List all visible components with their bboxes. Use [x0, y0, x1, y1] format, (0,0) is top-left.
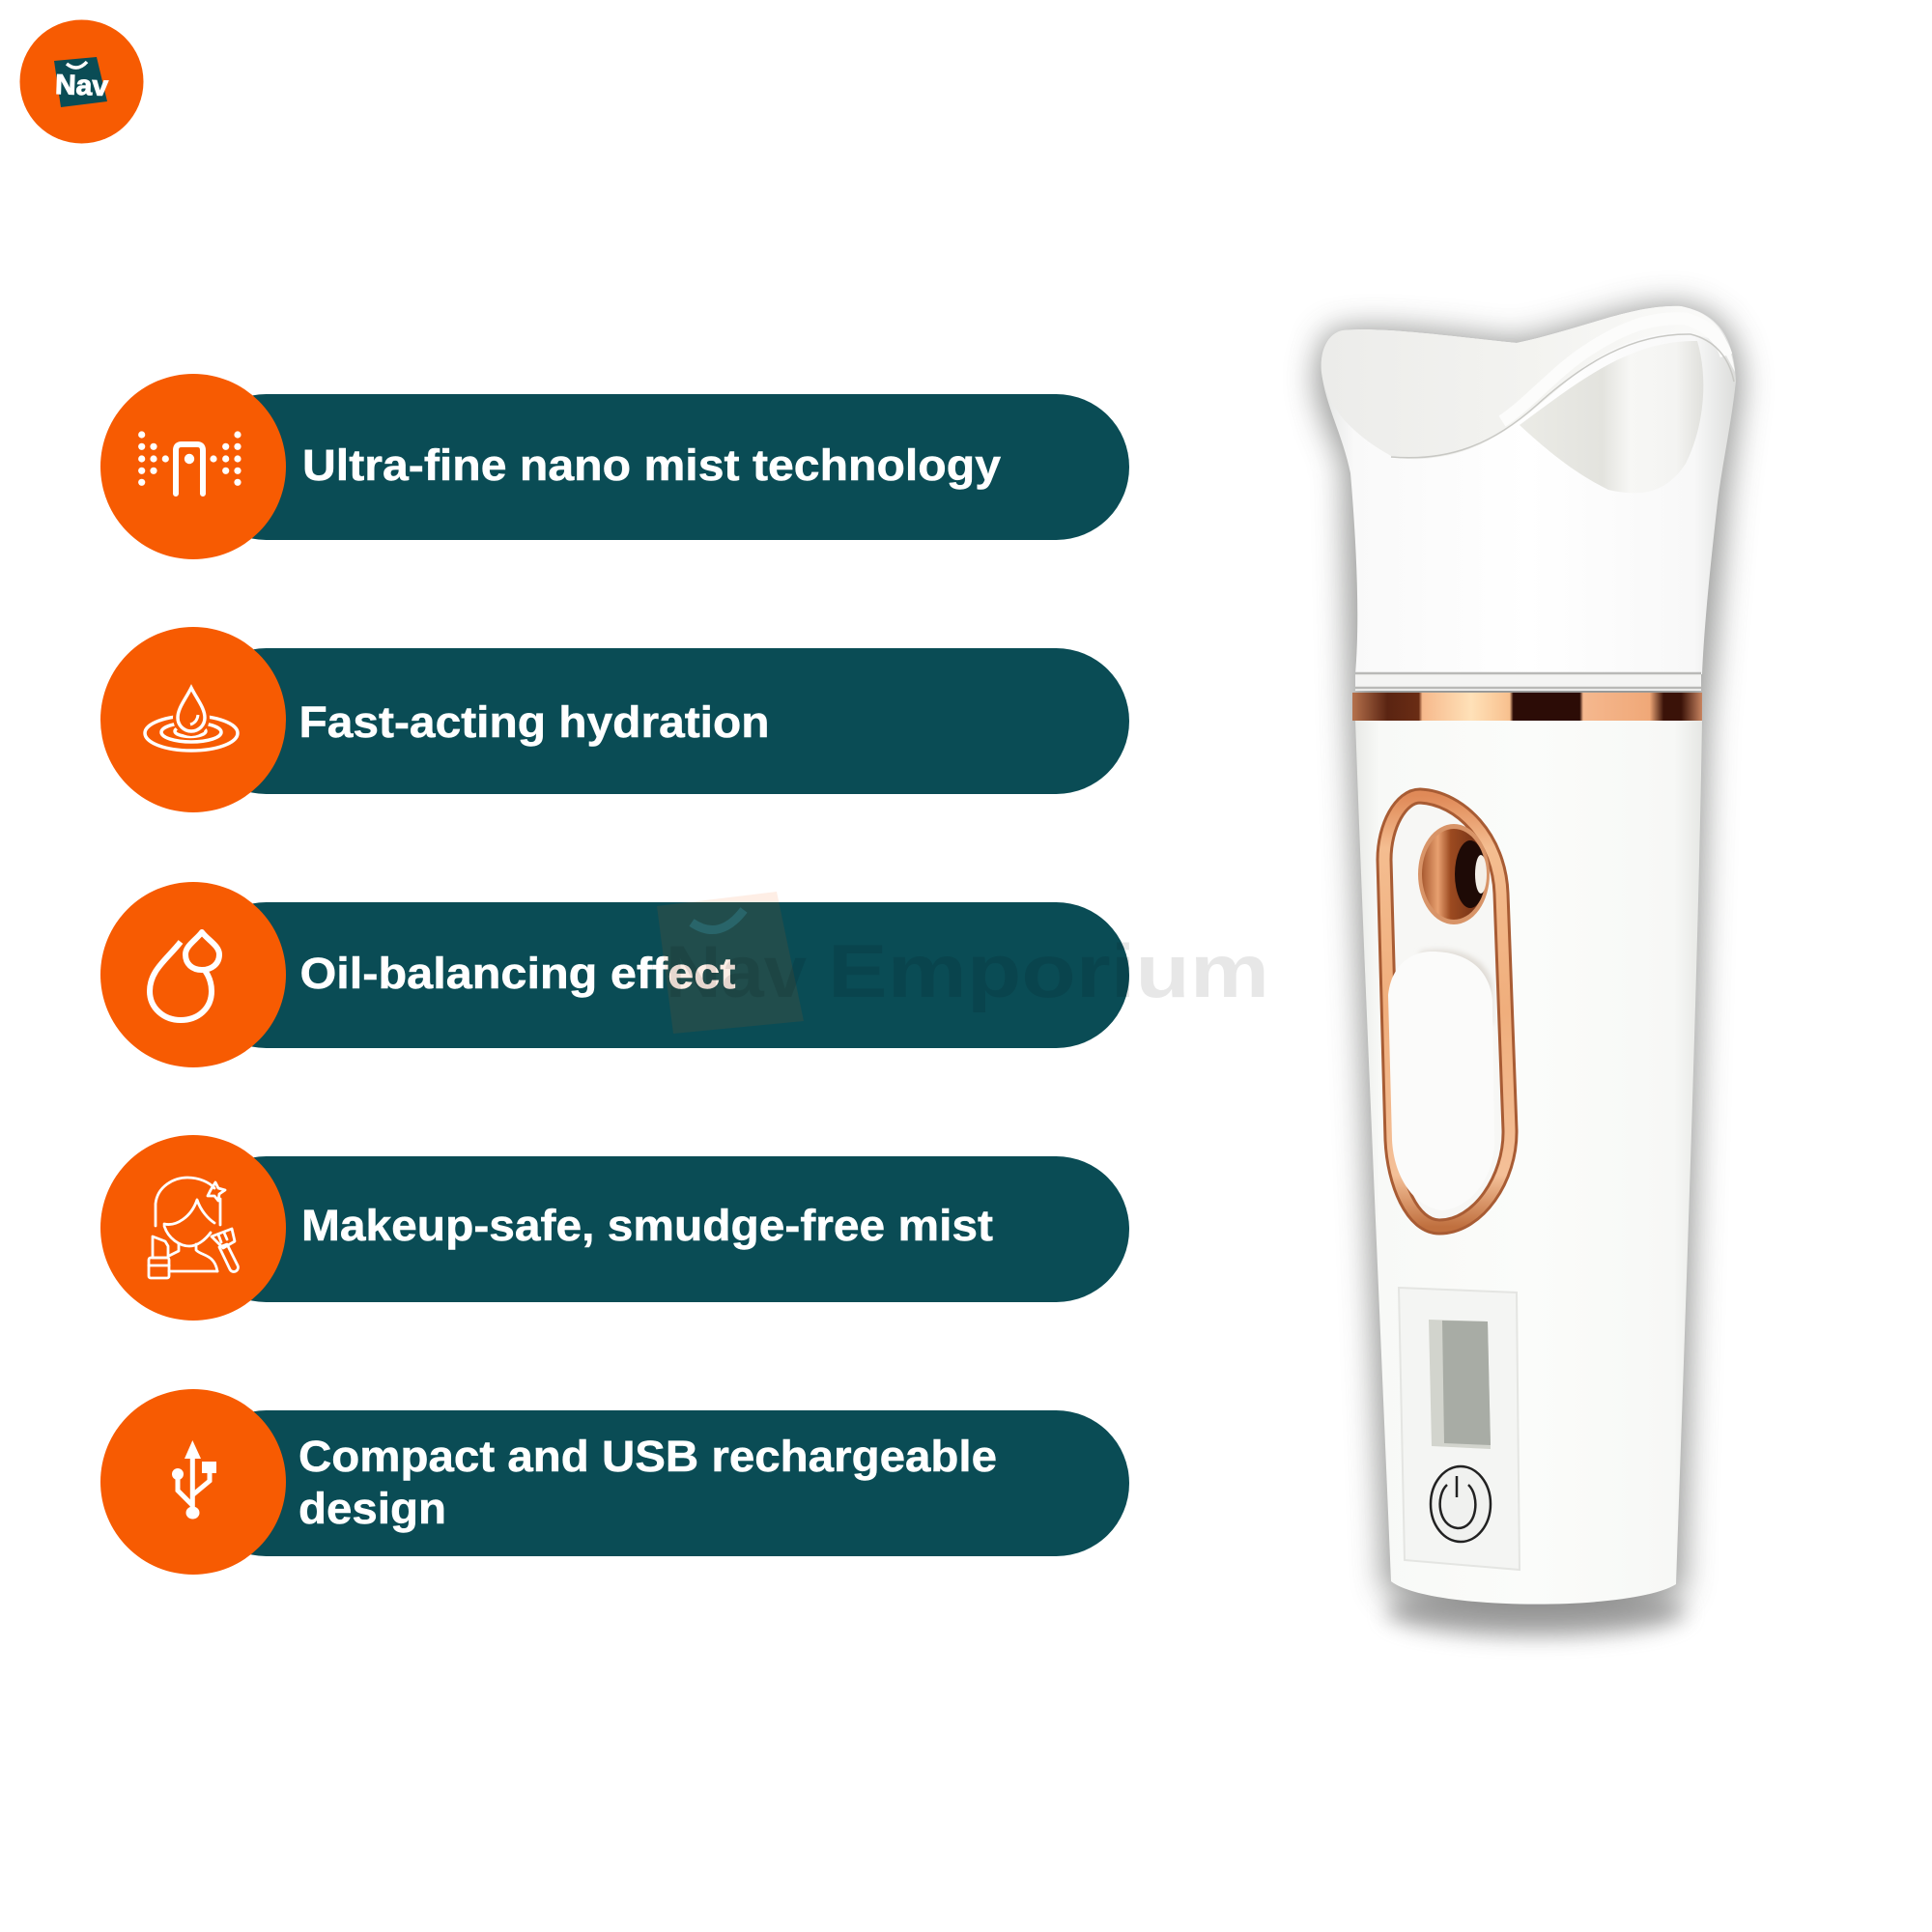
slot capsule: [1384, 796, 1510, 1227]
lip rim highlight: [1391, 334, 1734, 458]
icon circle 5: [100, 1389, 286, 1575]
pill 3: [193, 902, 1129, 1048]
pill 1: [193, 394, 1129, 540]
spray nozzle: [1418, 824, 1490, 924]
bottom shadow: [1386, 1586, 1686, 1636]
collar ring: [1355, 673, 1701, 691]
logo badge: [19, 19, 143, 143]
slide button shadow: [1420, 950, 1492, 1024]
device body: [1355, 720, 1702, 1605]
label 2: Fast-acting hydration: [299, 697, 769, 747]
pill 5: [193, 1410, 1129, 1556]
capsule frame outer: [1384, 796, 1510, 1227]
icon circle 2: [100, 627, 286, 812]
label 5: Compact and USB rechargeable: [298, 1432, 997, 1481]
front lip: [1321, 306, 1735, 459]
slide button: [1388, 952, 1494, 1210]
feature row 5: USB: [100, 1389, 1129, 1575]
inner cup: [1520, 341, 1703, 493]
pill 2: [193, 648, 1129, 794]
glass head: [1321, 306, 1736, 674]
icon circle 4: [100, 1135, 286, 1321]
feature row 2: hydration: [100, 627, 1129, 812]
icon: oil drops: [150, 932, 219, 1020]
label 4: Makeup-safe, smudge-free mist: [301, 1201, 993, 1250]
watermark Nav text: Nav: [666, 931, 807, 1013]
label 5: design: [298, 1484, 446, 1533]
icon: USB: [172, 1440, 216, 1519]
label 1: Ultra-fine nano mist technology: [302, 440, 1001, 490]
capsule frame inner: [1384, 796, 1510, 1227]
label 3: Oil-balancing effect: [299, 949, 736, 998]
watermark logo mark: [657, 892, 804, 1034]
display panel: [1399, 1288, 1520, 1570]
pill 4: [193, 1156, 1129, 1302]
icon circle 3: [100, 882, 286, 1067]
feature row 1: nano mist: [100, 374, 1129, 559]
icon: water drop with ripples: [145, 688, 238, 751]
feature row 3: oil balancing: [100, 882, 1129, 1067]
power button: [1431, 1466, 1491, 1542]
device shadow: [1321, 310, 1736, 1608]
LCD screen: [1429, 1320, 1491, 1449]
icon: mist nozzle: [138, 431, 242, 494]
rose gold band: [1352, 693, 1702, 721]
product: facial mist sprayer: [1321, 306, 1736, 1636]
collar highlight lines: [1355, 673, 1701, 688]
icon circle 1: [100, 374, 286, 559]
watermark Emporium text: Emporium: [828, 928, 1269, 1013]
feature row 4: makeup safe: [100, 1135, 1129, 1321]
icon: woman with makeup: [149, 1178, 238, 1278]
lip white rim band: [1502, 319, 1726, 421]
watermark: [657, 892, 1269, 1034]
logo badge: Nav: [54, 70, 109, 102]
